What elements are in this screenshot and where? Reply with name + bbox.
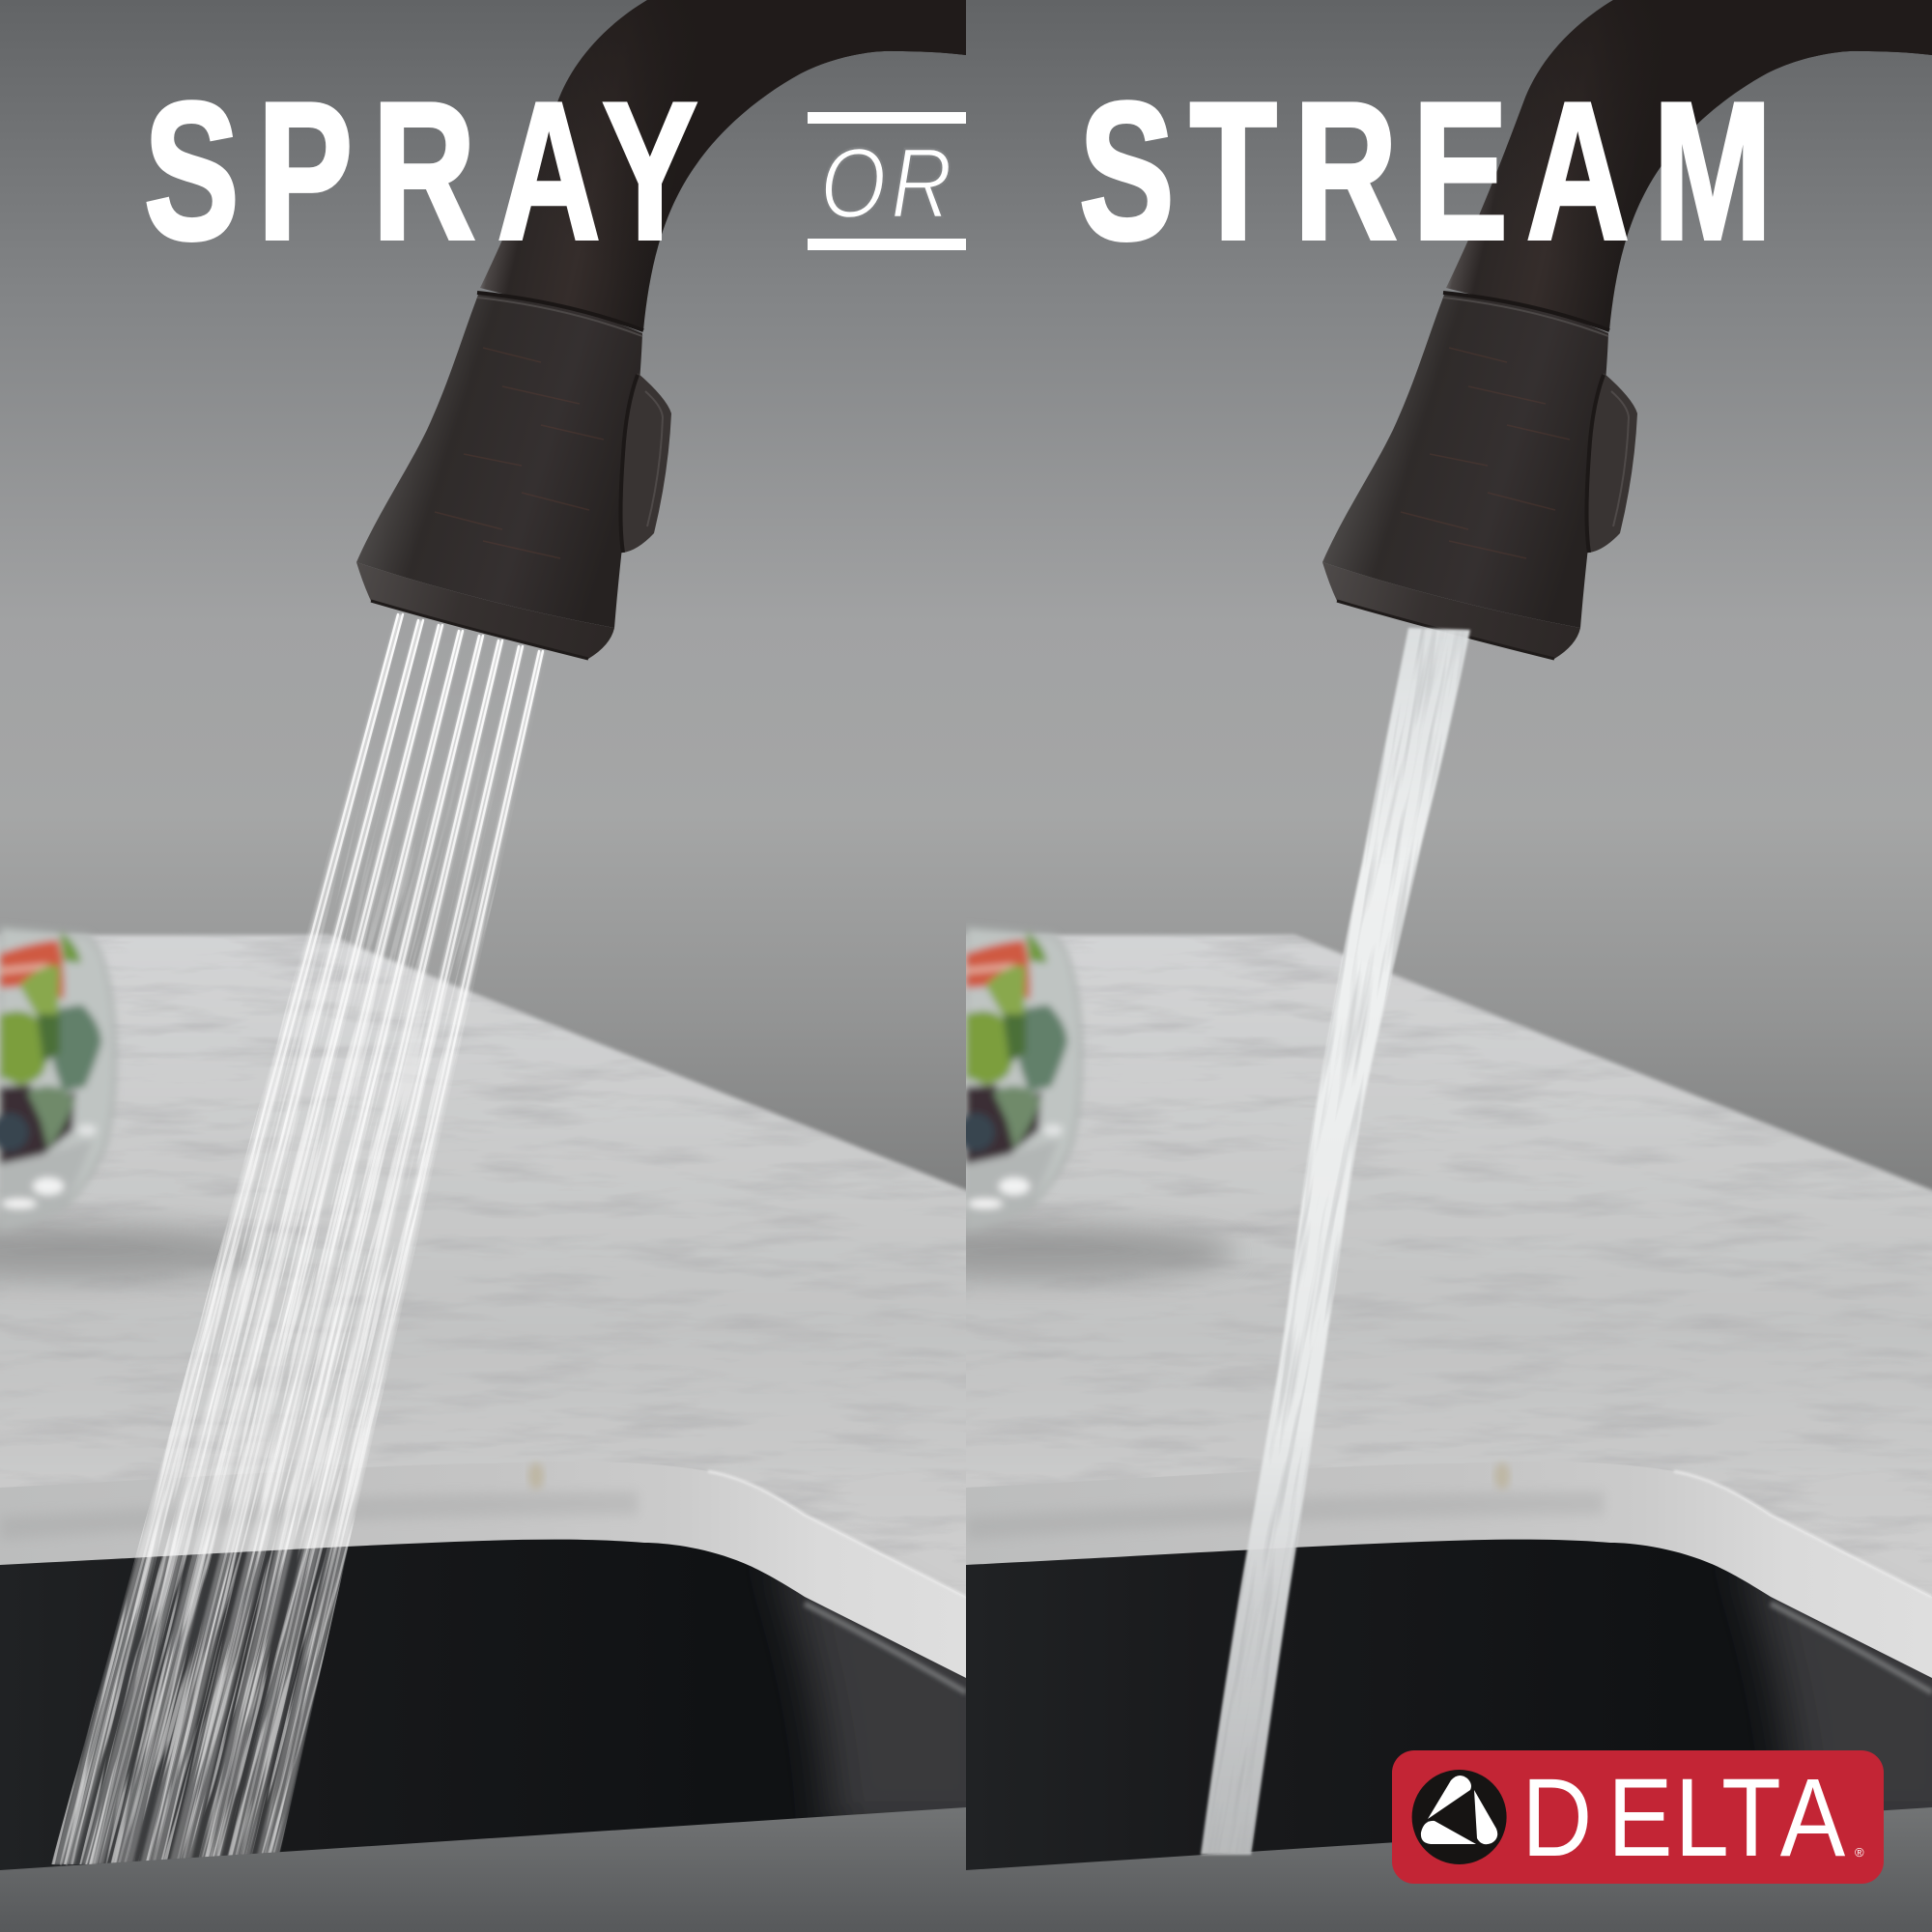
sink wall grain	[802, 1594, 966, 1826]
bowl of salad	[0, 927, 115, 1229]
groove ring	[477, 293, 643, 330]
leaves	[60, 932, 81, 963]
glass base highlights	[0, 1140, 92, 1229]
spray haze	[51, 1225, 402, 1864]
pause button	[620, 373, 671, 553]
wordmark: DELTA	[1521, 1755, 1846, 1879]
registered mark: ®	[1855, 1845, 1864, 1860]
sink basin	[0, 1517, 966, 1879]
marble countertop	[0, 935, 976, 1671]
heading: OR with rules	[808, 112, 966, 250]
flange	[356, 562, 614, 659]
strawberry	[0, 940, 64, 1000]
near counter foreground	[0, 1807, 966, 1932]
sink rim highlight	[805, 1604, 966, 1692]
logo: Delta badge	[1392, 1750, 1884, 1884]
panel: spray scene (left photo)	[0, 0, 1005, 1932]
heading: OR with rules: OR	[820, 128, 952, 240]
faucet arched neck	[480, 0, 966, 330]
spray water	[51, 612, 545, 1866]
heading: SPRAY: SPRAY	[144, 61, 697, 280]
background wall gradient	[0, 0, 966, 1256]
glass bowl	[0, 927, 115, 1229]
fine broken spray strands	[0, 506, 688, 1932]
heading: STREAM: STREAM	[1079, 61, 1773, 280]
icon: Delta emblem	[1412, 1770, 1507, 1864]
countertop polished front lip	[0, 1462, 966, 1678]
spray stream wedges	[53, 614, 544, 1864]
dark berries	[0, 1085, 75, 1164]
stream water	[1081, 566, 1592, 1932]
stream ribbon	[1201, 628, 1470, 1855]
spray bright cores	[61, 614, 543, 1864]
brushed finish streaks	[435, 348, 604, 558]
faucet	[356, 0, 966, 659]
bowl shadow	[0, 1223, 270, 1281]
stream streak texture	[1081, 566, 1592, 1932]
panel: stream scene (right photo)	[831, 0, 1932, 1932]
faucet spray head cone	[356, 295, 642, 628]
sink right wall	[773, 1546, 1005, 1835]
